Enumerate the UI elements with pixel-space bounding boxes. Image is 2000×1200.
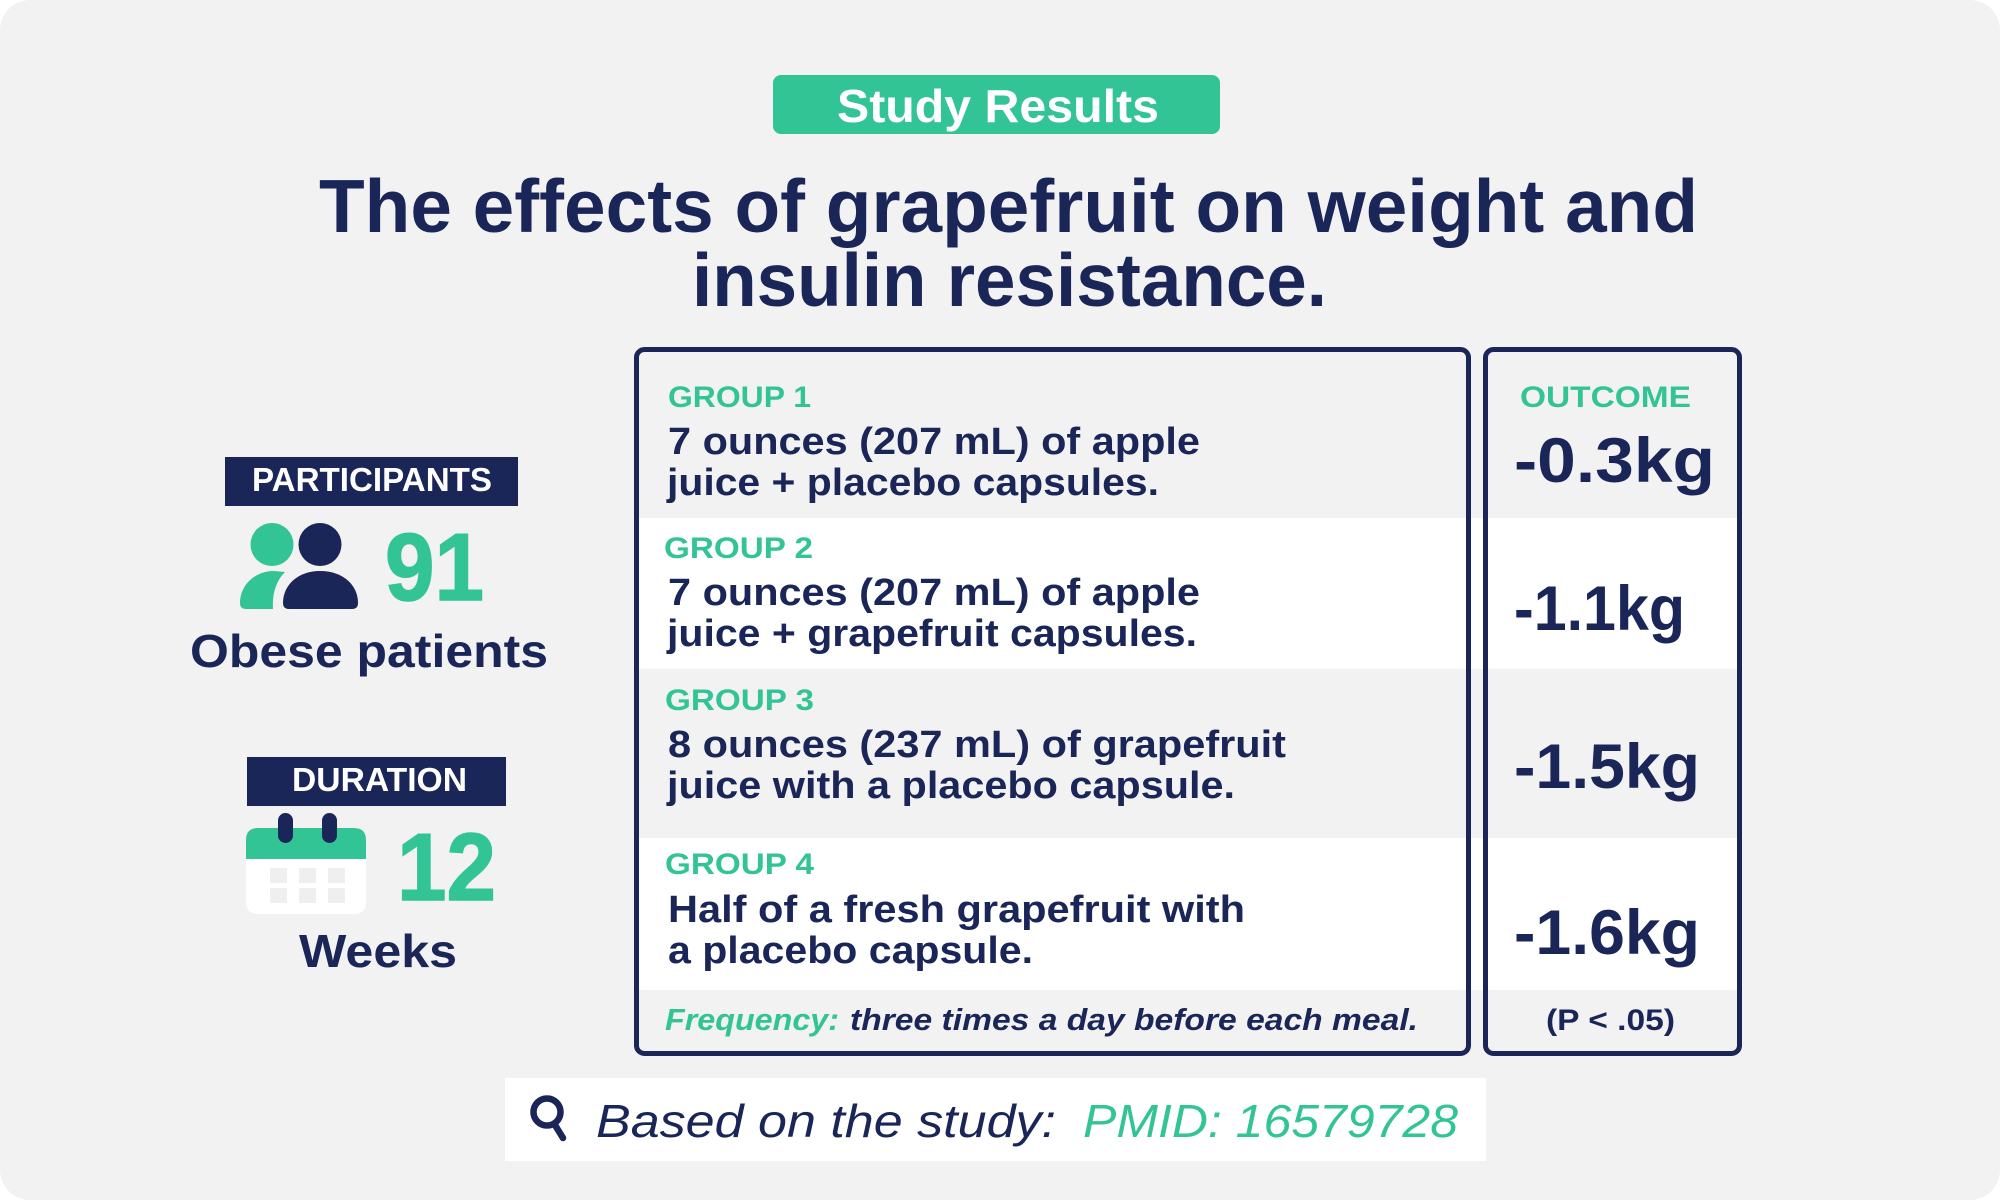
outcome group 2: -1.1kg (1514, 574, 1685, 644)
outcome group 3: -1.5kg (1514, 732, 1700, 802)
outcome group 4: -1.6kg (1514, 898, 1700, 968)
participants label: PARTICIPANTS (252, 461, 492, 498)
badge: Study Results (773, 75, 1220, 134)
group 1: juice + placebo capsules. (666, 462, 1159, 504)
duration label (247, 757, 506, 806)
title: insulin resistance. (692, 238, 1327, 322)
citation bar (505, 1078, 1486, 1161)
icon: two people (240, 523, 358, 609)
duration block (246, 757, 506, 977)
panel: outcome column (1486, 350, 1740, 1054)
group 3: GROUP 3 (665, 684, 814, 717)
group 4: Half of a fresh grapefruit with (668, 889, 1245, 931)
group 4: GROUP 4 (665, 848, 814, 881)
group 1 (666, 381, 1200, 504)
icon: calendar (246, 813, 366, 914)
p value: (P < .05) (1546, 1004, 1675, 1037)
duration unit: Weeks (299, 925, 457, 977)
frequency note: three times a day before each meal. (850, 1002, 1418, 1037)
group 2: juice + grapefruit capsules. (666, 613, 1197, 655)
group 4 (665, 848, 1245, 972)
participants label (225, 457, 518, 506)
duration label: DURATION (292, 761, 467, 798)
group 2 (664, 532, 1200, 655)
group 2: GROUP 2 (664, 532, 813, 565)
icon: magnifier (534, 1098, 563, 1138)
outcome heading: OUTCOME (1520, 381, 1691, 414)
citation PMID: PMID: 16579728 (1083, 1095, 1458, 1147)
frequency note: Frequency: (665, 1002, 839, 1037)
white row bands (636, 518, 1739, 990)
group 4: a placebo capsule. (668, 930, 1033, 972)
group 3: juice with a placebo capsule. (666, 765, 1235, 807)
outcome group 1: -0.3kg (1514, 426, 1715, 496)
citation text: Based on the study: (596, 1095, 1056, 1147)
group 3: 8 ounces (237 mL) of grapefruit (668, 724, 1286, 766)
group 1: GROUP 1 (668, 381, 811, 414)
panel: groups table (636, 350, 1468, 1054)
group 2: 7 ounces (207 mL) of apple (668, 572, 1200, 614)
title (319, 164, 1698, 322)
group 3 (665, 684, 1286, 807)
duration count: 12 (397, 814, 496, 921)
participants block (190, 457, 548, 677)
participant count: 91 (385, 514, 484, 621)
participants description: Obese patients (190, 625, 548, 677)
group 1: 7 ounces (207 mL) of apple (668, 421, 1200, 463)
frequency note (665, 1002, 1418, 1037)
badge: Study Results: Study Results (837, 80, 1159, 132)
title: The effects of grapefruit on weight and (319, 164, 1698, 248)
